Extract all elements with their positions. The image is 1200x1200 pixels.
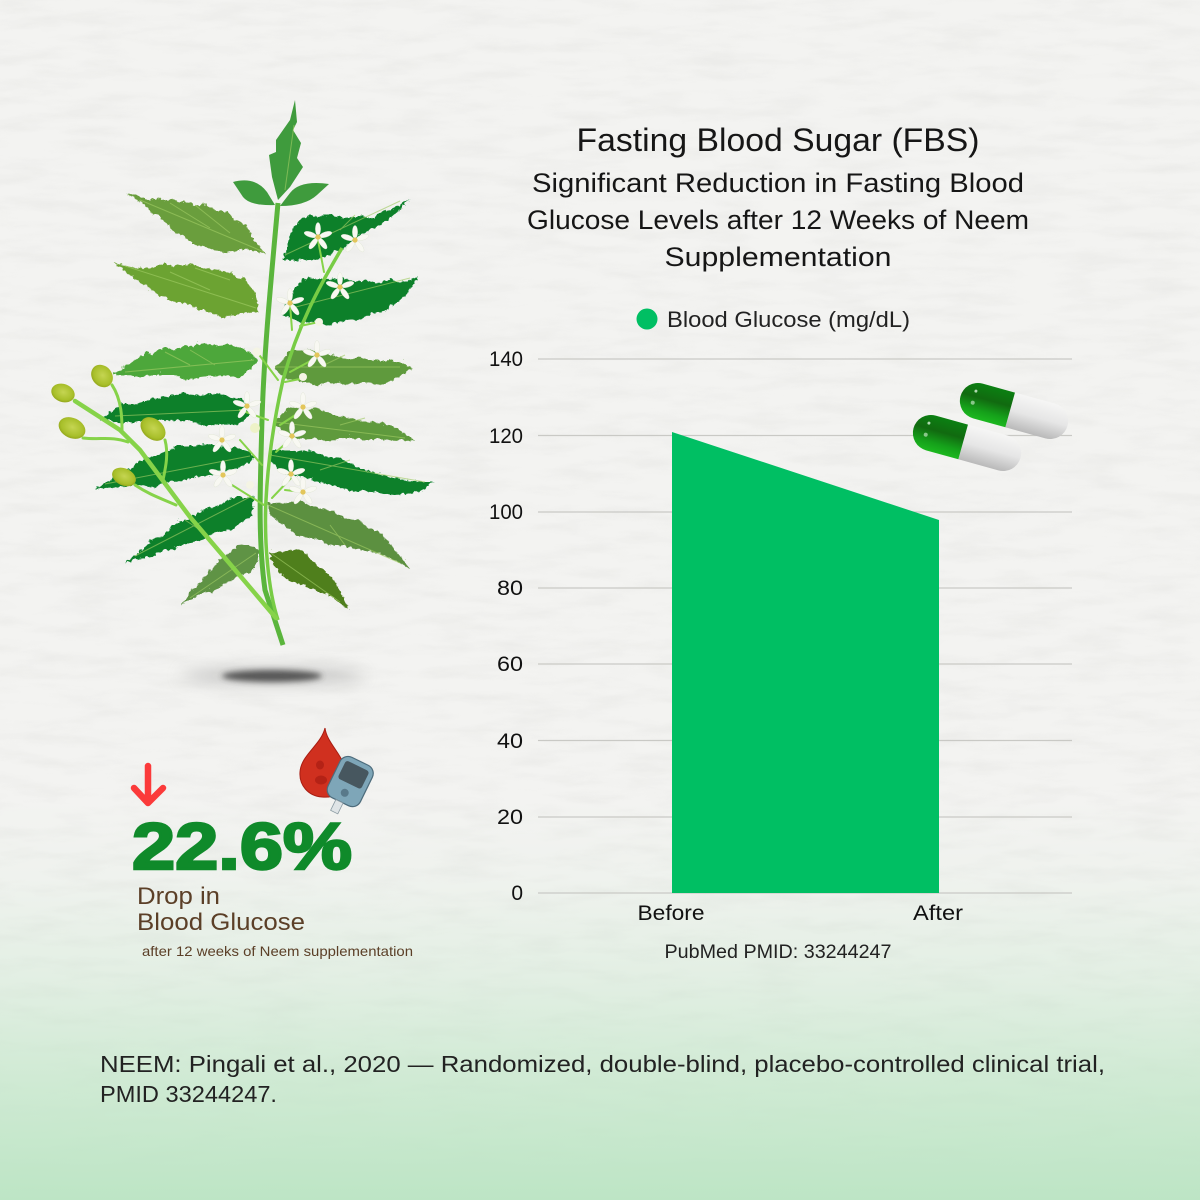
percentage: 22.6% xyxy=(132,809,352,883)
y axis labels: 140 xyxy=(489,348,523,371)
y axis labels: 60 xyxy=(497,653,523,676)
chart title block xyxy=(527,122,1029,272)
main stem xyxy=(260,203,283,645)
subtitle: Glucose Levels after 12 Weeks of Neem xyxy=(527,205,1029,235)
subtitle xyxy=(527,168,1029,272)
fruit branch xyxy=(75,240,324,618)
flowering stem xyxy=(266,248,342,620)
drop label: Blood Glucose xyxy=(137,909,305,936)
duration note: after 12 weeks of Neem supplementation xyxy=(142,943,413,959)
shadow under branch xyxy=(180,669,364,683)
icon: blood drop and glucose meter xyxy=(300,728,376,820)
y axis labels: 0 xyxy=(511,882,523,905)
leaf veins xyxy=(105,125,425,602)
icon: red down arrow xyxy=(134,766,163,803)
chart legend: Blood Glucose (mg/dL) xyxy=(667,307,910,332)
y axis labels: 100 xyxy=(489,501,523,524)
x axis labels: Before xyxy=(638,902,704,925)
glucose area xyxy=(672,432,939,893)
illustration: neem branch xyxy=(49,100,433,683)
citation text: NEEM: Pingali et al., 2020 — Randomized, double-blind, placebo-controlled clinical trial, xyxy=(100,1051,1105,1077)
y axis labels: 80 xyxy=(497,577,523,600)
x axis labels: After xyxy=(913,902,963,925)
drop label: Drop in xyxy=(137,883,220,910)
subtitle: Significant Reduction in Fasting Blood xyxy=(532,168,1024,198)
stat callout xyxy=(132,728,413,959)
y axis labels: 120 xyxy=(489,425,523,448)
top leaves xyxy=(233,100,329,206)
area chart xyxy=(489,348,1072,963)
y axis labels: 40 xyxy=(497,730,523,753)
y axis labels: 20 xyxy=(497,806,523,829)
chart source: PubMed PMID: 33244247 xyxy=(664,941,892,963)
flowers xyxy=(207,222,370,505)
icon: capsules xyxy=(909,379,1072,475)
leaves, left side xyxy=(93,191,264,603)
citation text xyxy=(100,1051,1105,1107)
fruits xyxy=(49,360,170,490)
subtitle: Supplementation xyxy=(664,242,892,272)
x axis labels xyxy=(638,902,963,925)
leaves, right side xyxy=(266,197,433,608)
drop label xyxy=(137,883,305,936)
citation text: PMID 33244247. xyxy=(100,1081,277,1107)
y axis labels xyxy=(489,348,523,905)
title: Fasting Blood Sugar (FBS) xyxy=(576,122,980,158)
